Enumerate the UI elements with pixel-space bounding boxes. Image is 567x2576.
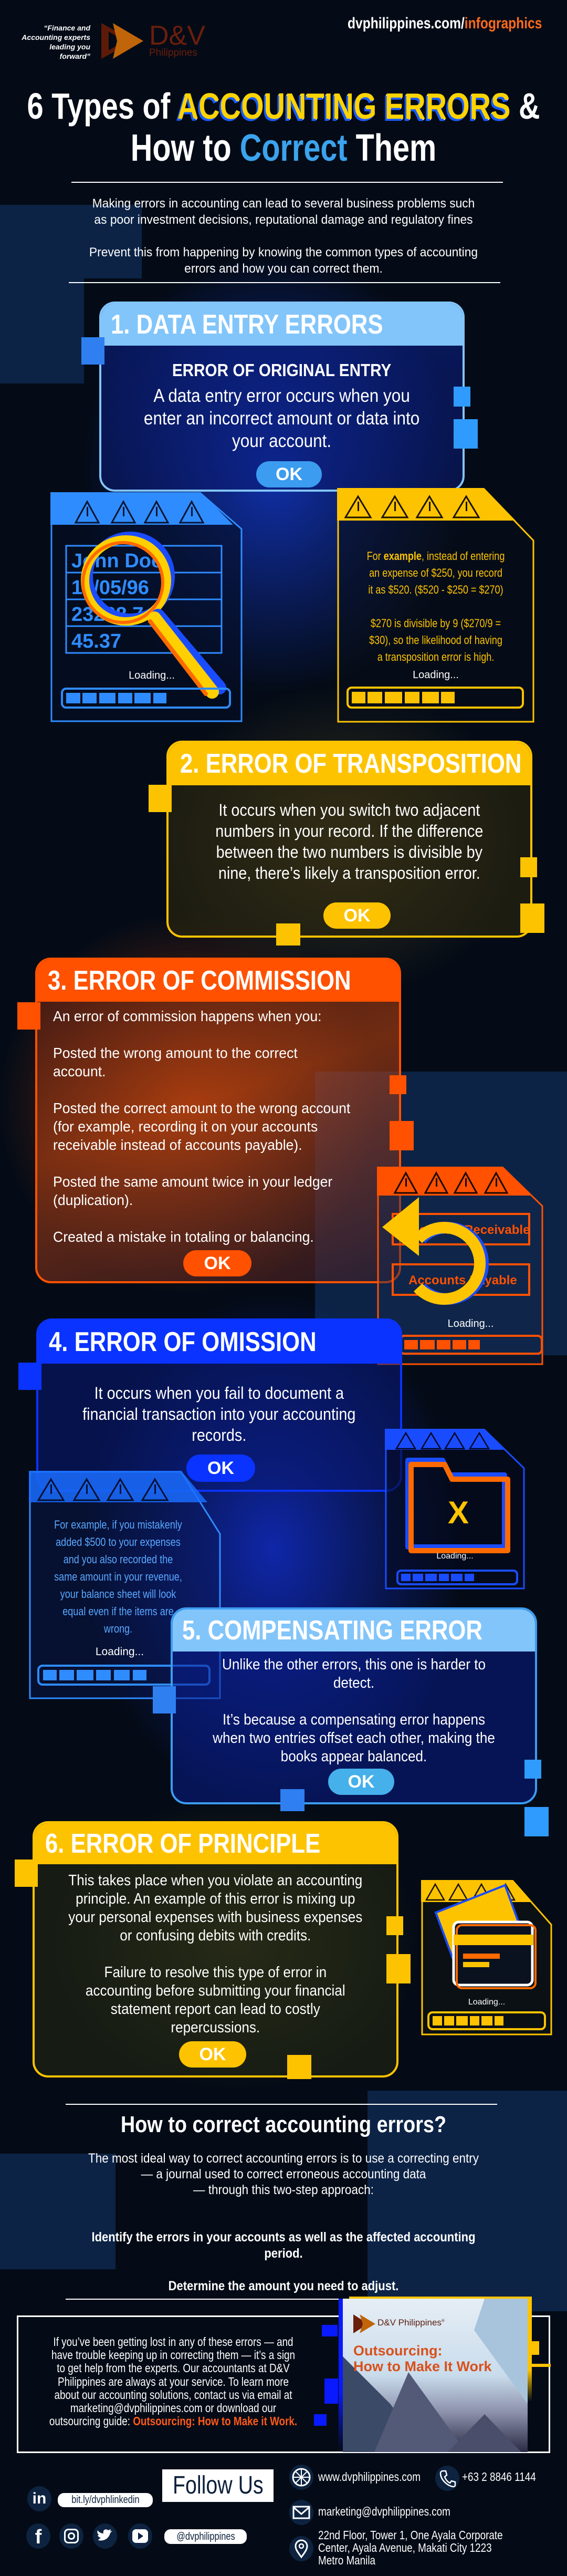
panel 3: (for example, recording it on your accounts — [53, 1118, 318, 1135]
window 2: transposition example: For example, instead of entering — [367, 549, 505, 563]
panel 1: ERROR OF ORIGINAL ENTRY — [172, 360, 392, 380]
panel 6: accounting before submitting your financial — [86, 1982, 345, 1999]
panel 1: enter an incorrect amount or data into — [144, 408, 420, 429]
social icons — [26, 2523, 247, 2549]
panel 4: OK — [207, 1458, 234, 1478]
panel 5: OK — [348, 1772, 375, 1792]
panel 1: A data entry error occurs when you — [154, 386, 410, 406]
text: bit.ly/dvphlinkedin — [71, 2494, 139, 2506]
window 2: transposition example — [337, 488, 534, 723]
panel 6 — [33, 1821, 398, 2078]
panel 3: (duplication). — [53, 1192, 133, 1208]
panel 3: OK — [204, 1253, 231, 1273]
panel 4: It occurs when you fail to document a — [94, 1384, 344, 1403]
window 2: transposition example: $270 is divisible by 9 ($270/9 = — [371, 617, 501, 630]
panel 6: your personal expenses with business expenses — [68, 1909, 363, 1926]
panel 6: 6. ERROR OF PRINCIPLE — [45, 1829, 320, 1859]
panel 6: or confusing debits with credits. — [120, 1927, 311, 1944]
contacts: Metro Manila — [318, 2553, 375, 2567]
social icons: f — [35, 2526, 41, 2548]
window 2: transposition example: $30), so the likelihood of having — [369, 633, 502, 647]
window 4: omission example — [29, 1471, 220, 1699]
panel 5 — [171, 1607, 537, 1804]
panel 2: It occurs when you switch two adjacent — [219, 801, 480, 819]
logo: Philippines — [149, 47, 197, 58]
text: to get help from the experts. Our accountants at D&V — [57, 2361, 290, 2375]
panel 1: your account. — [232, 431, 332, 451]
panel 2: nine, there’s likely a transposition error. — [218, 864, 480, 882]
panel 1: 1. DATA ENTRY ERRORS — [111, 309, 383, 340]
logo: D&V — [149, 20, 205, 51]
panel 3: Posted the wrong amount to the correct — [53, 1045, 298, 1061]
guide cover — [339, 2297, 551, 2452]
panel 1 — [99, 302, 465, 492]
panel 5: detect. — [333, 1675, 374, 1691]
heading: how to correct: How to correct accounting errors? — [121, 2112, 446, 2137]
guide cover: D&V Philippines® — [377, 2318, 445, 2328]
text: marketing@dvphilippines.com or download our — [70, 2401, 276, 2415]
intro text: errors and how you can correct them. — [184, 262, 383, 276]
correcting text — [88, 2151, 479, 2197]
window 3: receivable/payable: Accounts Payable — [408, 1273, 517, 1287]
panel 5: 5. COMPENSATING ERROR — [182, 1615, 482, 1646]
url: dvphilippines.com/infographics — [348, 15, 542, 32]
panel 5: Unlike the other errors, this one is harder to — [222, 1656, 486, 1673]
panel 3: Created a mistake in totaling or balancing. — [53, 1229, 314, 1245]
panel 6: This takes place when you violate an accounting — [68, 1872, 363, 1889]
contacts: www.dvphilippines.com — [318, 2470, 421, 2484]
window 1: magnifier: Loading... — [129, 670, 175, 681]
tagline: leading you — [49, 43, 90, 51]
panel 2: 2. ERROR OF TRANSPOSITION — [180, 749, 521, 779]
window 4: omission example: equal even if the items are — [62, 1605, 174, 1618]
text: If you’ve been getting lost in any of these errors — and — [53, 2335, 293, 2349]
panel 5: It’s because a compensating error happens — [223, 1711, 485, 1728]
intro text: as poor investment decisions, reputational damage and regulatory fines — [94, 213, 473, 227]
contacts: Center, Ayala Avenue, Makati City 1223 — [318, 2541, 492, 2554]
panel 2 — [166, 741, 532, 938]
social icons: @dvphilippines — [176, 2531, 235, 2542]
panel 3: 3. ERROR OF COMMISSION — [48, 965, 351, 996]
panel 2: numbers in your record. If the difference — [215, 822, 484, 840]
tagline — [22, 24, 90, 60]
panel 3: receivable instead of accounts payable). — [53, 1137, 302, 1153]
contacts: +63 2 8846 1144 — [462, 2470, 536, 2484]
steps: Identify the errors in your accounts as well as the affected accounting — [91, 2230, 476, 2245]
panel 6: OK — [200, 2044, 226, 2064]
window 1: magnifier: 23268.7 — [71, 604, 143, 626]
title — [27, 86, 540, 169]
window 5: folder: X — [448, 1495, 469, 1530]
window 2: transposition example: an expense of $250, you record — [369, 566, 502, 579]
intro text: Making errors in accounting can lead to several business problems such — [92, 196, 475, 211]
icon: linkedin: in — [33, 2490, 46, 2507]
panel 3: Posted the same amount twice in your ledger — [53, 1173, 332, 1190]
panel 2: OK — [343, 906, 371, 926]
window 4: omission example: wrong. — [104, 1622, 132, 1635]
window 1: magnifier: 19/05/96 — [71, 577, 149, 599]
correcting text: — through this two-step approach: — [193, 2183, 374, 2197]
guide cover: Outsourcing: — [353, 2343, 442, 2359]
contacts: marketing@dvphilippines.com — [318, 2505, 450, 2518]
steps: period. — [264, 2246, 303, 2261]
panel 6: repercussions. — [171, 2019, 260, 2036]
steps: Determine the amount you need to adjust. — [169, 2279, 398, 2293]
panel 6: principle. An example of this error is mixing up — [76, 1891, 355, 1907]
window 2: transposition example: a transposition error is high. — [377, 650, 494, 663]
text: outsourcing guide: Outsourcing: How to Make it Work. — [49, 2414, 297, 2428]
steps — [91, 2230, 476, 2293]
correcting text: — a journal used to correct erroneous accounting data — [141, 2167, 426, 2182]
text: have trouble keeping up in correcting them — it’s a sign — [51, 2348, 295, 2362]
correcting text: The most ideal way to correct accounting errors is to use a correcting entry — [88, 2151, 479, 2166]
follow us: Follow Us — [173, 2471, 263, 2499]
contacts: 22nd Floor, Tower 1, One Ayala Corporate — [318, 2528, 503, 2542]
panel 4: 4. ERROR OF OMISSION — [49, 1327, 317, 1357]
text: Philippines are always at your service. To learn more — [58, 2375, 289, 2388]
panel 4: financial transaction into your accounting — [82, 1405, 356, 1424]
intro text: Prevent this from happening by knowing the common types of accounting — [89, 245, 478, 259]
panel 3: account. — [53, 1063, 106, 1079]
window 3: receivable/payable: Loading... — [448, 1318, 494, 1329]
window 6: credit card: Loading... — [468, 1998, 505, 2007]
panel 3: Posted the correct amount to the wrong account — [53, 1100, 350, 1116]
follow us — [162, 2469, 274, 2502]
window 4: omission example: same amount in your revenue, — [54, 1570, 182, 1583]
text: about our accounting solutions, contact us via email at — [55, 2388, 292, 2402]
intro text — [89, 196, 478, 276]
panel 5: books appear balanced. — [281, 1748, 427, 1765]
window 4: omission example: For example, if you mistakenly — [54, 1518, 182, 1531]
window 2: transposition example: it as $520. ($520 - $250 = $270) — [368, 583, 503, 596]
panel 3 — [35, 958, 401, 1283]
icon: linkedin — [27, 2486, 51, 2511]
window 5: folder — [385, 1429, 525, 1590]
window 3: receivable/payable: Accounts Receivable — [403, 1223, 530, 1237]
guide cover: How to Make It Work — [353, 2359, 492, 2374]
panel 6: statement report can lead to costly — [111, 2001, 320, 2018]
window 1: magnifier: John Doe — [71, 550, 162, 572]
logo — [101, 20, 205, 59]
panel 5: when two entries offset each other, making the — [213, 1730, 495, 1747]
window 1: magnifier — [50, 492, 243, 722]
window 6: credit card — [421, 1880, 552, 2035]
panel 4 — [36, 1318, 402, 1492]
tagline: forward” — [60, 52, 90, 60]
panel 3: An error of commission happens when you: — [53, 1008, 322, 1024]
title: How to Correct Them — [131, 127, 436, 169]
window 4: omission example: added $500 to your expenses — [56, 1535, 181, 1549]
window 4: omission example: and you also recorded the — [64, 1553, 173, 1566]
window 3: receivable/payable — [377, 1167, 543, 1365]
panel 4: records. — [192, 1426, 247, 1445]
window 5: folder: Loading... — [436, 1552, 474, 1561]
contacts — [289, 2465, 536, 2567]
tagline: Accounting experts — [22, 33, 90, 41]
window 1: magnifier: 45.37 — [71, 630, 121, 652]
panel 6: Failure to resolve this type of error in — [104, 1964, 327, 1981]
window 2: transposition example: Loading... — [413, 669, 459, 681]
CTA box — [17, 2315, 550, 2453]
title: 6 Types of ACCOUNTING ERRORS & — [27, 86, 540, 127]
window 4: omission example: Loading... — [96, 1646, 144, 1658]
panel 2: between the two numbers is divisible by — [216, 843, 482, 861]
window 4: omission example: your balance sheet will look — [60, 1587, 176, 1601]
panel 1: OK — [276, 464, 302, 484]
tagline: “Finance and — [44, 24, 90, 32]
